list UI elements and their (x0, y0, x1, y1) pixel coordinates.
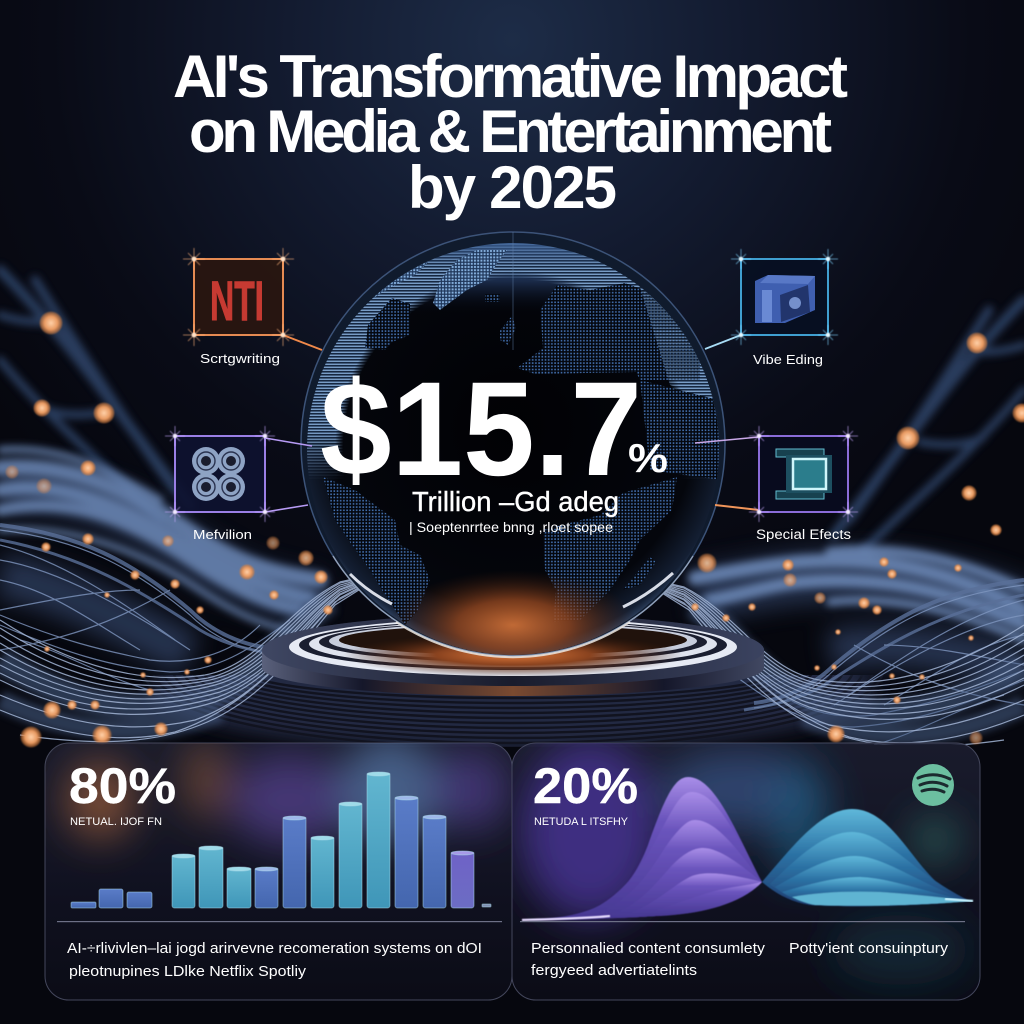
title (173, 43, 848, 221)
icon card: Mefvilion (165, 426, 312, 542)
title: AI's Transformative Impact (173, 43, 848, 110)
description: Personnalied content consumlety (531, 941, 766, 957)
icon card: Special Effects (695, 426, 858, 542)
globe (300, 232, 730, 680)
description: AI-÷rlivivlen–lai jogd arirvevne recomeration systems on dOI (67, 941, 482, 957)
stat 80%: 80% (69, 758, 176, 814)
panel: right personalized content stats (512, 740, 980, 1000)
icon: teal screen (776, 449, 832, 499)
bar chart (71, 772, 491, 908)
floor: radial ridges under the platform (144, 675, 884, 747)
purple wave (522, 777, 762, 920)
divider (520, 921, 965, 922)
continent: Siberia stripes (640, 288, 712, 398)
divider (57, 921, 502, 922)
platform with glowing rings (262, 614, 764, 696)
label: Special Efects (756, 527, 851, 542)
panel glows (65, 735, 510, 845)
glowing base line (522, 916, 610, 920)
title: by 2025 (408, 154, 617, 221)
top highlight (414, 243, 632, 302)
stat caption: NETUAL. IJOF FN (70, 816, 162, 828)
icon card: Scriptwriting (183, 248, 322, 366)
description (67, 941, 482, 980)
panel glows (520, 740, 970, 985)
continent: British Isles (485, 294, 516, 345)
platform top surface (262, 614, 764, 686)
continent: South America (323, 477, 430, 625)
globe subtitle: | Soeptenrrtee bnng ,rloet sopee (409, 519, 613, 535)
fiber haze (695, 575, 1024, 670)
title: on Media & Entertainment (189, 98, 832, 165)
striped rim (307, 243, 719, 476)
description (531, 941, 949, 979)
big number: $15.7 %: % (628, 435, 668, 481)
description: fergyeed advertiatelints (531, 963, 697, 979)
icon: blue cube (755, 275, 815, 323)
icon: NTI logo: NTI (210, 269, 264, 332)
label: Vibe Eding (753, 352, 823, 367)
orange glow pool (343, 633, 683, 677)
orange inner glow (398, 574, 628, 655)
globe inner sphere (307, 243, 719, 655)
stat caption: NETUDA L ITSFHY (534, 816, 629, 828)
glass highlights (350, 574, 392, 604)
platform side wall (262, 614, 764, 696)
globe subtitle: Trillion –Gd adeg (412, 486, 619, 517)
big number: $15.7 %: $15.7 (320, 355, 642, 504)
fiber haze (0, 489, 320, 655)
rings (289, 618, 737, 676)
panel body (512, 743, 980, 1000)
description: pleotnupines LDlke Netflix Spotliy (69, 964, 307, 980)
panel body (45, 743, 512, 1000)
stat 20%: 20% (533, 758, 638, 814)
continent: North America (365, 298, 410, 350)
label: Scrtgwriting (200, 351, 280, 366)
description: Potty'ient consuinptury (789, 941, 949, 957)
glowing orange nodes (5, 311, 1024, 748)
continent: Greenland (433, 250, 507, 310)
globe outer glass shell (301, 232, 725, 656)
blue wave (762, 809, 973, 906)
label: Mefvilion (193, 527, 252, 542)
blurred fiber band (695, 550, 1024, 640)
fibers: left light waves (0, 270, 362, 742)
continent: East Asia (640, 380, 722, 480)
continent: Eurasia (517, 283, 700, 380)
panel: left recommendation stats (45, 735, 512, 1000)
icon: Spotify badge (912, 764, 954, 806)
icon card: Vibe Editing (705, 249, 838, 367)
icon: four rings (192, 447, 245, 501)
continent: Madagascar (623, 557, 656, 590)
fibers: right light waves (662, 300, 1024, 747)
continent: Africa (543, 477, 677, 622)
blurred fiber band (0, 449, 320, 630)
wave chart (522, 777, 973, 920)
globe subtitle (409, 486, 619, 535)
